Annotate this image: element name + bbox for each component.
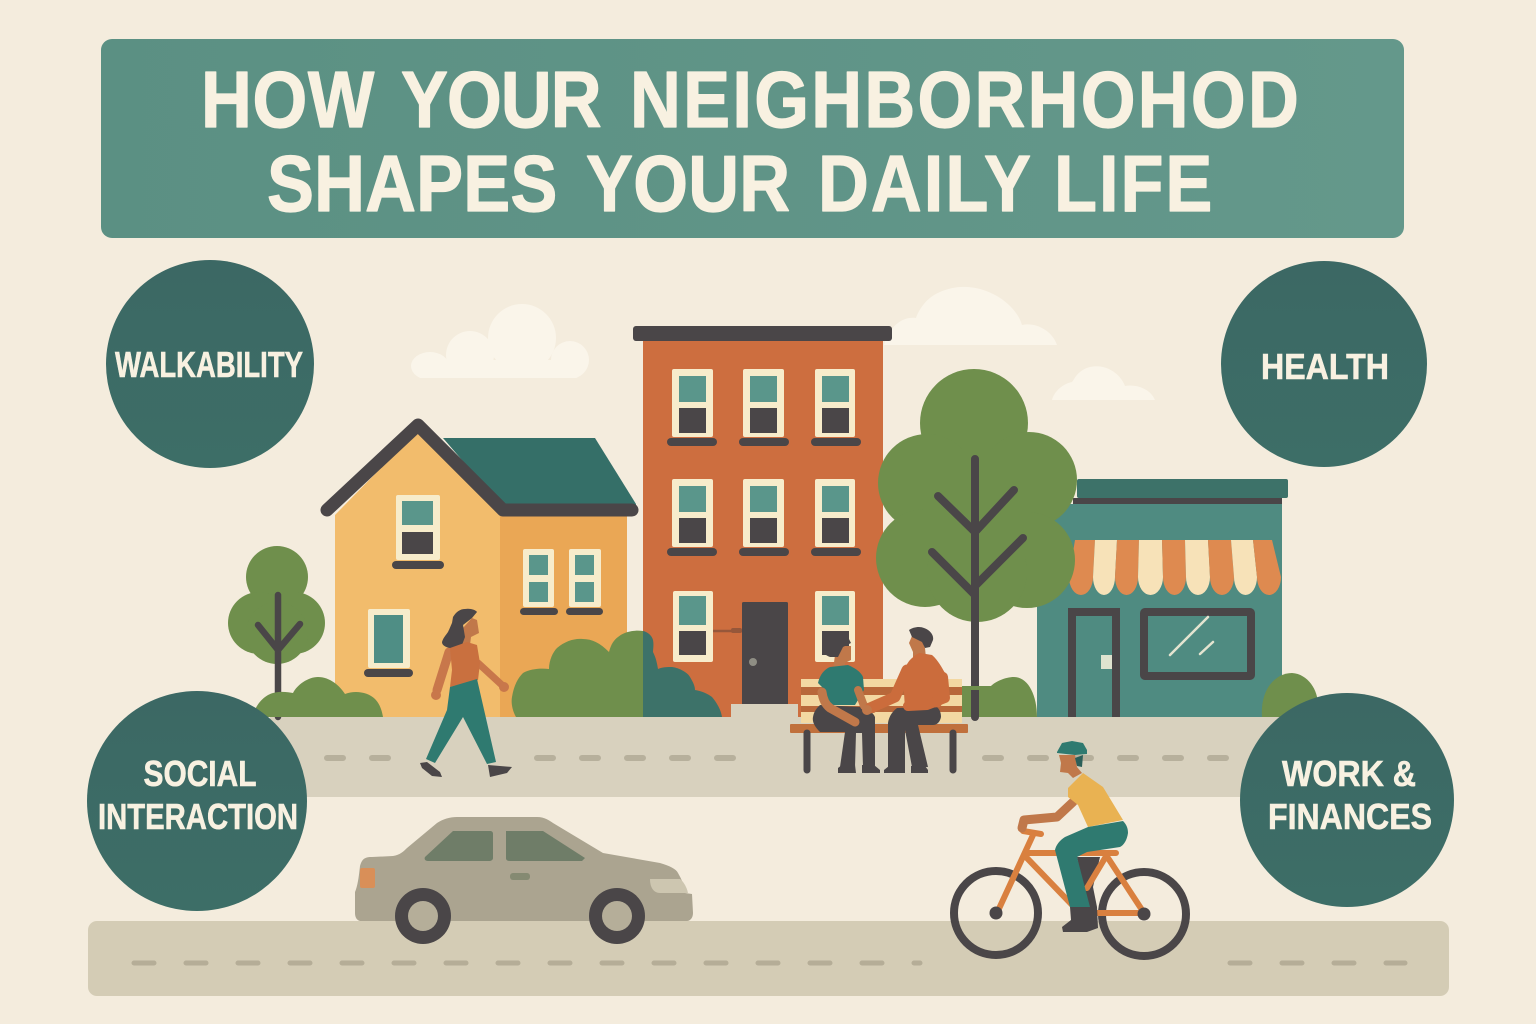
title: YOUR [401,55,602,144]
shrub under small tree [253,677,383,717]
yellow house [327,425,636,717]
brick apartment building [633,326,892,717]
title: DAILY [818,139,1031,228]
car wheels [395,888,645,944]
large tree [876,369,1077,717]
title: NEIGHBORHOHOD [630,55,1299,144]
sidewalk [270,717,1290,797]
title [201,55,1299,228]
steps [731,704,798,717]
bicycle wheels [954,871,1186,956]
door [742,602,788,705]
shop [1037,479,1288,717]
road dashes [134,960,1405,966]
shop door [1072,612,1116,717]
title: SHAPES [267,139,557,228]
badge: walkability [106,260,314,468]
apartment windows [667,369,861,662]
roof [443,438,636,510]
badge: work and finances: WORK & [1282,753,1416,794]
small tree left [228,546,325,717]
cyclist [954,741,1186,956]
car [355,817,693,944]
title banner [101,39,1404,238]
badge: walkability: WALKABILITY [115,344,303,385]
badge: health [1221,261,1427,467]
title: YOUR [586,139,790,228]
clouds [411,287,1155,400]
rider [1059,755,1082,778]
badge: social interaction: INTERACTION [98,796,298,837]
badge: social interaction: SOCIAL [144,753,256,794]
awning [1069,540,1281,595]
title: HOW [201,55,375,144]
house windows [364,495,603,677]
shrub behind bench [961,677,1037,717]
person left seated [813,633,880,773]
rear leg [1077,857,1100,907]
car windows [425,831,493,861]
road [88,921,1449,996]
person right seated [862,627,947,773]
bicycle frame [997,831,1144,913]
shrubs by building [512,631,722,717]
title: LIFE [1054,139,1212,228]
walking woman [420,609,512,777]
sidewalk dashes [327,755,1240,761]
badge: social interaction [87,691,307,911]
shop window [1144,612,1251,676]
bench with two people [790,627,968,773]
badge: work and finances [1240,693,1454,907]
badge: work and finances: FINANCES [1268,796,1432,837]
shrub right of shop [1262,673,1318,717]
badge: health: HEALTH [1261,346,1389,387]
